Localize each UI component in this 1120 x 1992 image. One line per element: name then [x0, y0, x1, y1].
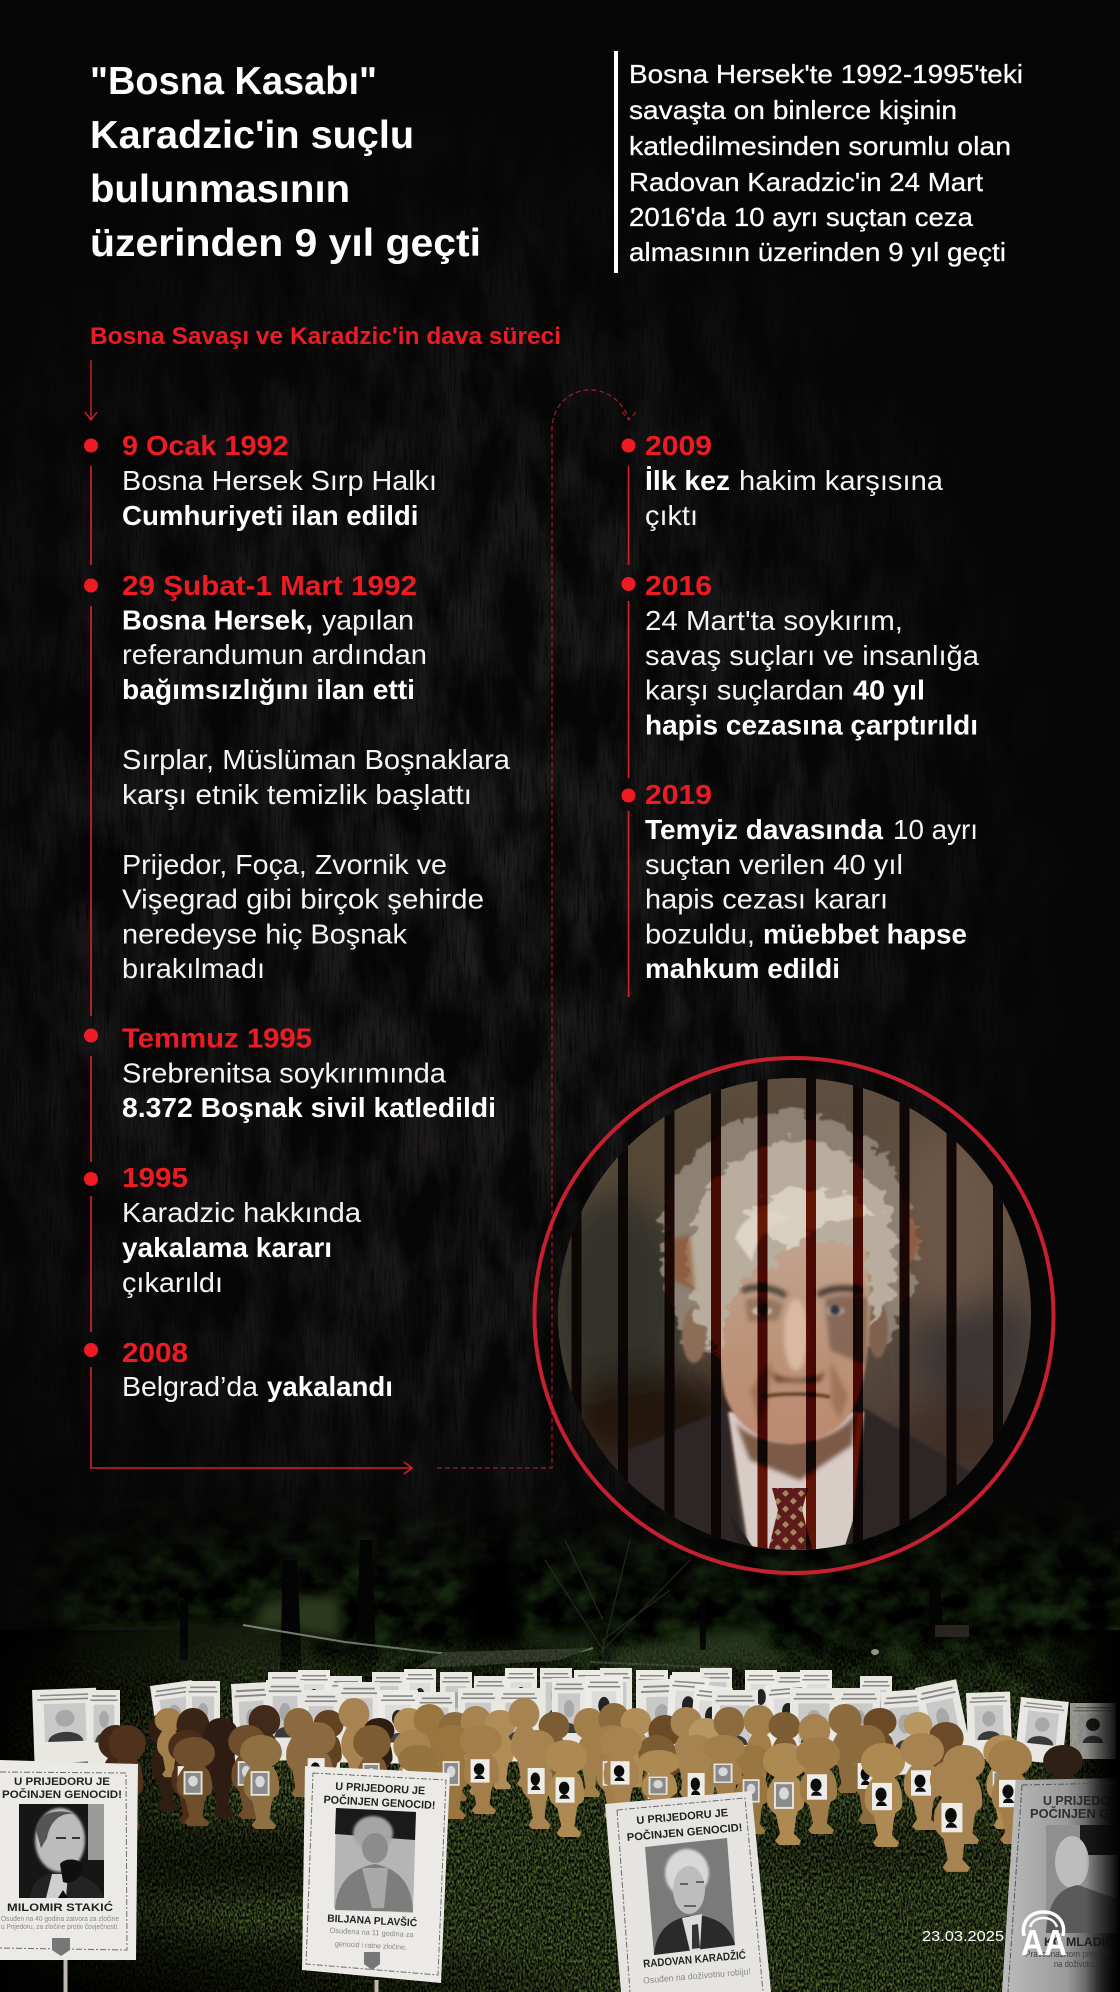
poster: Milomir Stakić	[0, 1760, 138, 1992]
timeline right column	[622, 430, 980, 997]
event: Temmuz 1995: Temmuz 1995	[122, 1022, 312, 1054]
event: 2019: Temyiz davasında	[645, 814, 884, 845]
poster: Milomir Stakić: POČINJEN GENOCID!	[2, 1788, 122, 1801]
poster: Milomir Stakić: u Prijedoru, za zločine protiv čovječnosti.	[1, 1924, 119, 1931]
event: 29 Şubat-1 Mart 1992: Sırplar, Müslüman Boşnaklara	[122, 744, 511, 775]
suit	[612, 1408, 970, 1543]
poster: Radovan Karadžić: POČINJEN GENOCID!	[626, 1821, 743, 1844]
event: 2008: Belgrad’da	[122, 1371, 259, 1402]
event: 2009: hakim karşısına	[739, 465, 944, 496]
intro divider bar	[614, 51, 618, 273]
event: 2008	[84, 1337, 393, 1402]
event: 29 Şubat-1 Mart 1992	[84, 570, 511, 1016]
cell bars	[572, 1070, 1003, 1560]
arrow: dashed connector to right column	[437, 390, 636, 1468]
date: 23.03.2025	[922, 1928, 1004, 1945]
event: Temmuz 1995	[84, 1022, 496, 1162]
event: 9 Ocak 1992: Cumhuriyeti ilan edildi	[122, 500, 418, 531]
intro text block: Radovan Karadzic'in 24 Mart	[629, 167, 984, 197]
poster: right, fading: KO MLADIĆ	[1044, 1934, 1114, 1949]
poster: Biljana Plavšić: Osuđena na 11 godina za	[329, 1926, 415, 1939]
tie	[768, 1488, 812, 1550]
title: "Bosna Kasabı"	[90, 60, 377, 103]
poster: Milomir Stakić: MILOMIR STAKIĆ	[7, 1901, 113, 1914]
hair front	[688, 1140, 896, 1360]
near posters	[32, 1675, 1116, 1776]
poster: Biljana Plavšić: genocid i ratne zločine.	[335, 1939, 407, 1952]
event: 9 Ocak 1992: Bosna Hersek Sırp Halkı	[122, 465, 437, 496]
event: 29 Şubat-1 Mart 1992: karşı etnik temizlik başlattı	[122, 779, 472, 810]
event: 2019: hapis cezası kararı	[645, 884, 888, 914]
poster: Radovan Karadžić: RADOVAN KARADŽIĆ	[643, 1949, 746, 1970]
logo: Anadolu Agency: AA	[1021, 1922, 1067, 1963]
poster: Milomir Stakić: Osuđen na 40 godina zatvora za zločine	[1, 1916, 119, 1923]
facial shadows	[742, 1287, 868, 1425]
poster: Milomir Stakić: U PRIJEDORU JE	[14, 1776, 110, 1788]
event: 1995: Karadzic hakkında	[122, 1197, 362, 1228]
portrait behind bars	[534, 1058, 1054, 1573]
poster: Biljana Plavšić: U PRIJEDORU JE	[335, 1781, 425, 1797]
event: 2019: müebbet hapse	[763, 918, 967, 950]
poster: Radovan Karadžić	[605, 1791, 771, 1992]
event: 9 Ocak 1992: 9 Ocak 1992	[122, 430, 288, 461]
event: 1995	[84, 1162, 362, 1332]
event: 2009: İlk kez	[645, 465, 730, 496]
face	[717, 1229, 870, 1444]
silhouette figures, back rows	[98, 1698, 985, 1844]
far posters	[268, 1668, 892, 1746]
event: 2009: çıktı	[645, 500, 698, 531]
event: 2009	[622, 430, 944, 565]
event: 2019: suçtan verilen 40 yıl	[645, 849, 903, 880]
park path	[243, 1625, 593, 1658]
event: 2016: 24 Mart'ta soykırım,	[645, 605, 903, 636]
event: 1995: yakalama kararı	[122, 1232, 332, 1263]
event: 29 Şubat-1 Mart 1992: 29 Şubat-1 Mart 1992	[122, 570, 417, 601]
event: 29 Şubat-1 Mart 1992: Prijedor, Foça, Zvornik ve	[122, 849, 447, 880]
ears	[682, 1307, 706, 1363]
title: üzerinden 9 yıl geçti	[90, 222, 481, 265]
eyes	[752, 1305, 845, 1397]
title	[90, 60, 481, 265]
silhouette figures, middle row	[168, 1722, 1021, 1834]
event: 29 Şubat-1 Mart 1992: Bosna Hersek,	[122, 604, 313, 636]
section heading: Bosna Savaşı ve Karadzic'in dava süreci	[90, 323, 561, 350]
event: Temmuz 1995: 8.372 Boşnak sivil katledildi	[122, 1092, 496, 1123]
tree trunks	[180, 1540, 944, 1670]
timeline left column	[84, 430, 511, 1402]
intro text block: almasının üzerinden 9 yıl geçti	[629, 237, 1006, 267]
poster: right, fading	[1002, 1690, 1120, 1992]
poster: right, fading: POČINJEN GE	[1030, 1806, 1118, 1821]
intro text block: 2016'da 10 ayrı suçtan ceza	[629, 202, 974, 232]
park background with trees	[44, 1518, 1120, 1695]
poster: Biljana Plavšić	[302, 1766, 450, 1992]
photo scene: memorial lawn with posters and silhouettes	[0, 1490, 1120, 1992]
intro text block	[629, 59, 1023, 267]
event: 9 Ocak 1992	[84, 430, 437, 565]
event: 1995: çıkarıldı	[122, 1267, 223, 1298]
event: 2016: 40 yıl	[853, 674, 925, 706]
red ring	[534, 1058, 1054, 1573]
shirt	[728, 1412, 864, 1560]
red tint of the bars over the face	[572, 1078, 1003, 1550]
poster: Biljana Plavšić: POČINJEN GENOCID!	[323, 1793, 436, 1812]
event: 2009: 2009	[645, 430, 712, 461]
intro text block: Bosna Hersek'te 1992-1995'teki	[629, 59, 1023, 89]
event: 2019: 10 ayrı	[893, 814, 978, 845]
poster: Radovan Karadžić: Osuđen na doživotnu robiju!	[643, 1966, 751, 1986]
event: 29 Şubat-1 Mart 1992: Vişegrad gibi birçok şehirde	[122, 884, 484, 914]
event: 2019: mahkum edildi	[645, 953, 840, 984]
poster: Biljana Plavšić: BILJANA PLAVŠIĆ	[327, 1912, 418, 1929]
event: 2016: karşı suçlardan	[645, 674, 844, 706]
event: 2019: 2019	[645, 779, 712, 810]
event: 2019: bozuldu,	[645, 918, 755, 950]
silhouette figures, front row	[108, 1725, 1083, 1872]
event: 29 Şubat-1 Mart 1992: bırakılmadı	[122, 953, 265, 984]
event: 2016: savaş suçları ve insanlığa	[645, 640, 980, 671]
hair back	[661, 1110, 918, 1350]
portrait photo	[545, 1070, 1040, 1560]
event: 2019	[622, 779, 978, 997]
title: bulunmasının	[90, 168, 350, 211]
arrow: start of timeline	[85, 360, 97, 420]
event: Temmuz 1995: Srebrenitsa soykırımında	[122, 1058, 447, 1088]
event: 2016	[622, 570, 980, 778]
background: dark grunge texture	[0, 270, 938, 1510]
event: 29 Şubat-1 Mart 1992: referandumun ardından	[122, 639, 427, 670]
title: Karadzic'in suçlu	[90, 114, 414, 157]
bare tree	[545, 1540, 690, 1760]
arrow: timeline bottom horizontal connector	[91, 1367, 412, 1474]
event: 2016: hapis cezasına çarptırıldı	[645, 710, 978, 740]
event: 29 Şubat-1 Mart 1992: yapılan	[322, 604, 414, 636]
event: 1995: 1995	[122, 1162, 188, 1193]
poster: Radovan Karadžić: U PRIJEDORU JE	[636, 1807, 729, 1827]
event: 2008: yakalandı	[267, 1371, 393, 1402]
grass lawn	[0, 1630, 1120, 1992]
event: 29 Şubat-1 Mart 1992: neredeyse hiç Boşnak	[122, 918, 407, 950]
intro text block: savaşta on binlerce kişinin	[629, 95, 957, 125]
neck	[735, 1412, 856, 1480]
event: 29 Şubat-1 Mart 1992: bağımsızlığını ilan etti	[122, 674, 415, 705]
event: 2008: 2008	[122, 1337, 188, 1368]
event: 2016: 2016	[645, 570, 712, 601]
intro text block: katledilmesinden sorumlu olan	[629, 131, 1011, 161]
